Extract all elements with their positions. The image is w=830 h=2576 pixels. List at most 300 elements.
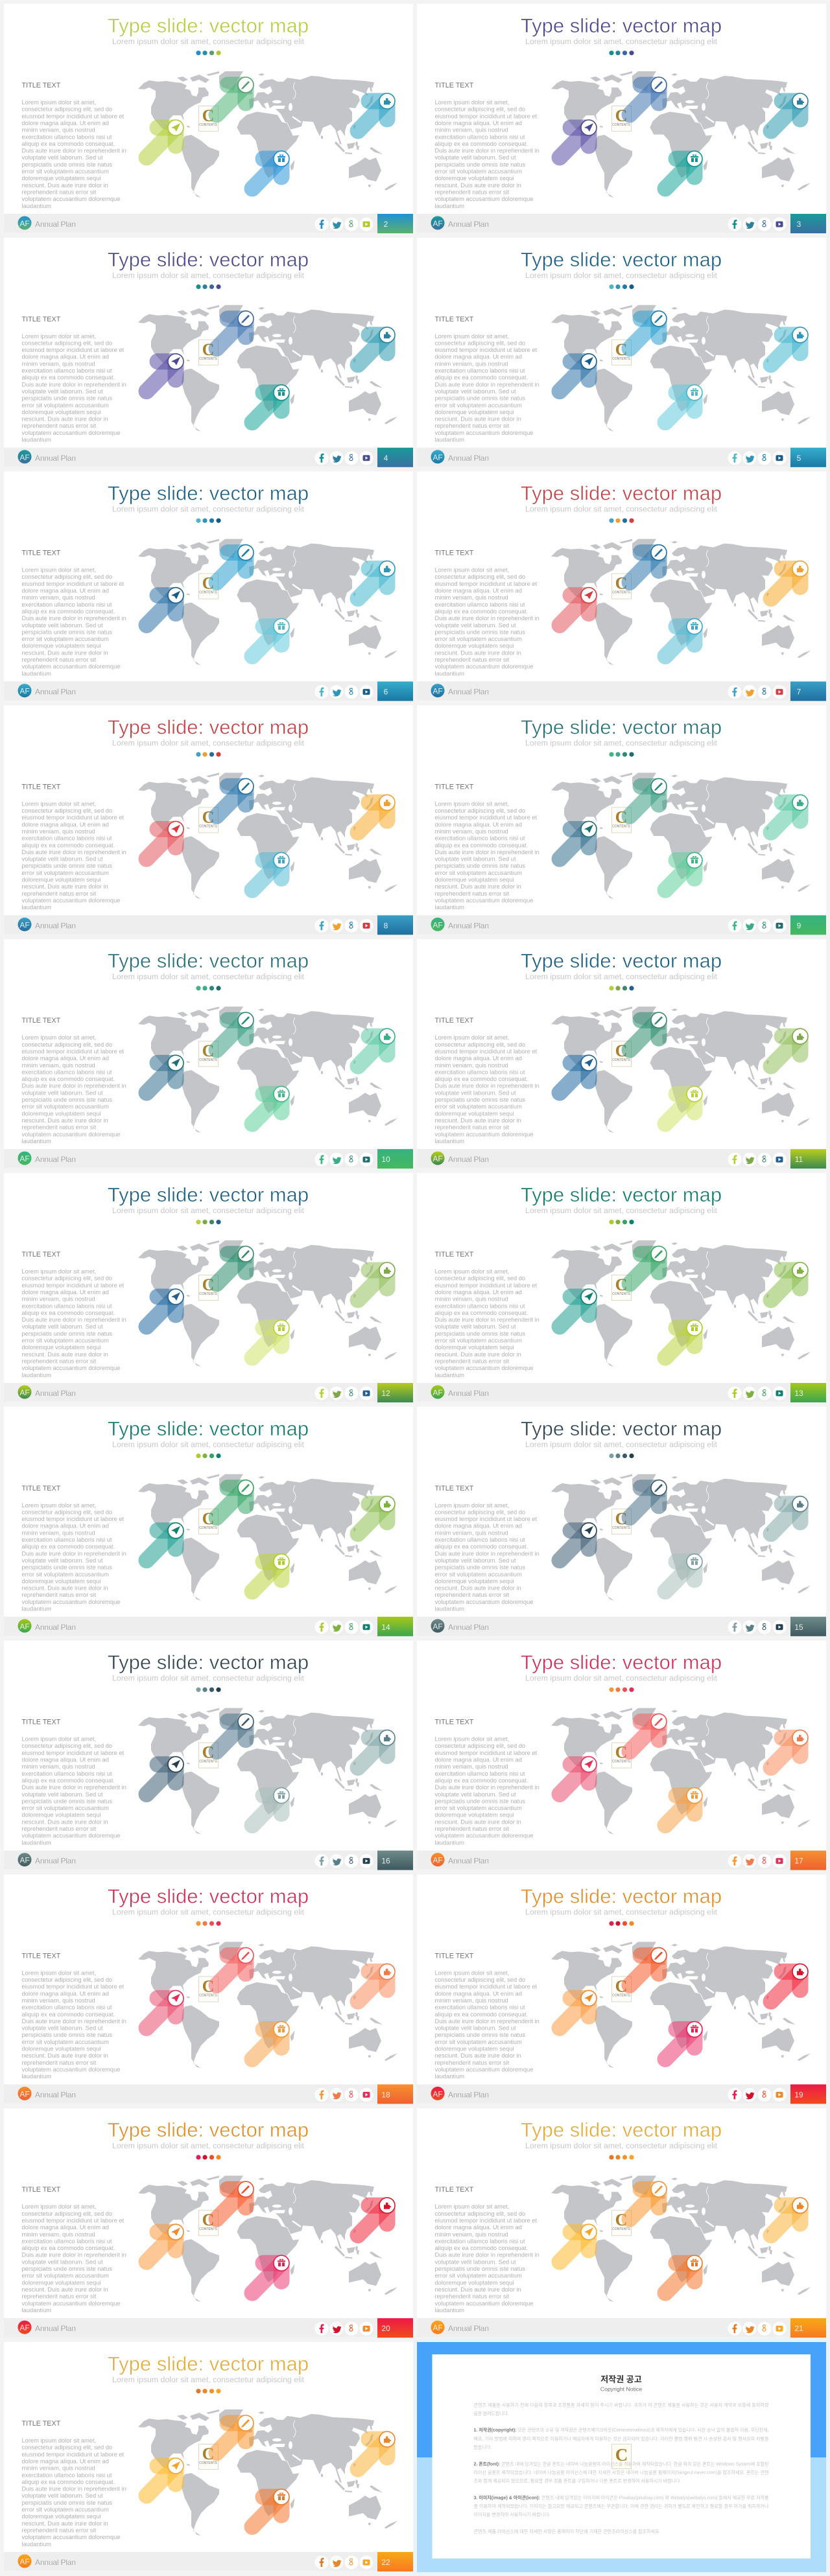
logo stamp	[198, 2444, 218, 2469]
body text: perspiciatis unde omnis iste natus	[434, 1564, 525, 1571]
body text: laudantium	[22, 2541, 51, 2547]
body text: consectetur adipiscing elit, sed do	[22, 340, 112, 346]
body text: eiusmod tempor incididunt ut labore et	[22, 1984, 124, 1990]
body text: laudantium	[22, 904, 51, 911]
body text: minim veniam, quis nostrud	[22, 2231, 95, 2238]
body text: perspiciatis unde omnis iste natus	[434, 863, 525, 869]
map pins	[147, 1246, 395, 1358]
body text: voluptatem accusantium doloremque	[434, 196, 533, 202]
text heading: TITLE TEXT	[22, 1251, 61, 1259]
body text: error sit voluptatem accusantium	[434, 870, 522, 876]
text heading: TITLE TEXT	[22, 316, 61, 323]
slide 16	[4, 1641, 413, 1870]
footer: 11	[795, 1155, 803, 1164]
body text: nesciunt. Duis aute irure dolor in	[434, 1818, 521, 1825]
body text: error sit voluptatem accusantium	[22, 1805, 109, 1811]
copyright subheading: Copyright Notice	[600, 2386, 642, 2393]
footer: 7	[797, 688, 801, 697]
body text: exercitation ullamco laboris nisi ut	[22, 1770, 112, 1777]
body text: Lorem ipsum dolor sit amet,	[434, 1034, 509, 1041]
body text: Duis aute irure dolor in reprehenderit in	[22, 148, 126, 154]
dots	[196, 986, 221, 990]
body text: voluptatem accusantium doloremque	[22, 664, 120, 670]
slide 20	[4, 2108, 413, 2338]
body text: reprehenderit natus error sit	[22, 890, 97, 897]
subtitle: Lorem ipsum dolor sit amet, consectetur adipiscing elit	[112, 738, 305, 747]
dots	[196, 1454, 221, 1458]
body text: exercitation ullamco laboris nisi ut	[22, 133, 112, 140]
body text: minim veniam, quis nostrud	[22, 360, 95, 367]
body text: consectetur adipiscing elit, sed do	[434, 1977, 525, 1983]
body text: voluptate velit laborum. Sed ut	[22, 856, 103, 863]
body text: reprehenderit natus error sit	[434, 1592, 510, 1598]
footer	[4, 1383, 413, 1402]
footer: Annual Plan	[35, 2090, 76, 2099]
body text: exercitation ullamco laboris nisi ut	[22, 601, 112, 608]
body text: perspiciatis unde omnis iste natus	[434, 1330, 525, 1337]
body text: error sit voluptatem accusantium	[22, 1571, 109, 1577]
slide 14	[4, 1407, 413, 1636]
subtitle: Lorem ipsum dolor sit amet, consectetur adipiscing elit	[525, 37, 718, 46]
map pins	[560, 545, 808, 656]
body text: Duis aute irure dolor in reprehenderit in	[434, 1083, 540, 1089]
body text: doloremque voluptatem sequi	[22, 409, 101, 415]
body text: Lorem ipsum dolor sit amet,	[22, 2203, 96, 2210]
body text: minim veniam, quis nostrud	[22, 2465, 95, 2472]
footer: AF	[19, 1154, 30, 1163]
body text: eiusmod tempor incididunt ut labore et	[434, 815, 538, 821]
body text: dolore magna aliqua. Ut enim ad	[22, 588, 109, 594]
body text: laudantium	[22, 2073, 51, 2080]
world map	[138, 2409, 397, 2536]
footer: Annual Plan	[448, 1623, 489, 1632]
footer: Annual Plan	[35, 2324, 76, 2333]
logo stamp	[198, 106, 218, 131]
dots	[196, 518, 221, 523]
footer: Annual Plan	[448, 688, 489, 697]
body text: consectetur adipiscing elit, sed do	[434, 340, 525, 346]
text heading: TITLE TEXT	[22, 1485, 61, 1492]
footer: 20	[381, 2324, 390, 2333]
intro paragraph: 음을 알려드립니다.	[473, 2410, 509, 2416]
body text: eiusmod tempor incididunt ut labore et	[22, 113, 124, 119]
body text: laudantium	[434, 1138, 464, 1144]
title: Type slide: vector map	[108, 949, 309, 972]
dots	[609, 1921, 634, 1926]
dots	[196, 51, 221, 55]
body text: dolore magna aliqua. Ut enim ad	[434, 1757, 522, 1763]
body text: Duis aute irure dolor in reprehenderit in	[22, 615, 126, 621]
body text: exercitation ullamco laboris nisi ut	[22, 1303, 112, 1309]
body text: eiusmod tempor incididunt ut labore et	[434, 2217, 538, 2223]
dots	[196, 2389, 221, 2393]
body text: minim veniam, quis nostrud	[22, 1062, 95, 1069]
body text: dolore magna aliqua. Ut enim ad	[22, 1523, 109, 1529]
body text: laudantium	[22, 670, 51, 677]
title: Type slide: vector map	[108, 2118, 309, 2141]
body text: voluptatem accusantium doloremque	[22, 430, 120, 436]
body text: minim veniam, quis nostrud	[434, 594, 508, 601]
map pins	[560, 1947, 808, 2059]
body text: consectetur adipiscing elit, sed do	[434, 1743, 525, 1749]
body text: dolore magna aliqua. Ut enim ad	[22, 2458, 109, 2465]
title: Type slide: vector map	[108, 482, 309, 505]
paragraph 2: 츠와 함께 제공되지 않으므로, 필요할 경우 정품 폰트를 구입하거나 다른 폰트로 변경하여 사용하시기 바랍니다.	[473, 2478, 682, 2484]
body text: doloremque voluptatem sequi	[434, 2279, 514, 2286]
footer: 17	[794, 1857, 803, 1866]
world map	[138, 71, 397, 198]
body text: voluptatem accusantium doloremque	[22, 2534, 120, 2540]
subtitle: Lorem ipsum dolor sit amet, consectetur adipiscing elit	[112, 1206, 305, 1215]
logo stamp	[198, 2210, 218, 2236]
footer: AF	[433, 219, 443, 228]
body text: aliquip ex ea commodo consequat.	[22, 1778, 115, 1784]
body text: minim veniam, quis nostrud	[434, 828, 508, 835]
body text: doloremque voluptatem sequi	[434, 643, 514, 649]
body text: nesciunt. Duis aute irure dolor in	[22, 649, 108, 656]
body text: eiusmod tempor incididunt ut labore et	[22, 815, 124, 821]
body text: consectetur adipiscing elit, sed do	[22, 574, 112, 580]
dots	[196, 752, 221, 757]
body text: aliquip ex ea commodo consequat.	[22, 1310, 115, 1316]
body text: error sit voluptatem accusantium	[22, 2039, 109, 2045]
body text: consectetur adipiscing elit, sed do	[434, 807, 525, 814]
body text: aliquip ex ea commodo consequat.	[22, 608, 115, 614]
slide 4	[4, 238, 413, 467]
subtitle: Lorem ipsum dolor sit amet, consectetur adipiscing elit	[525, 972, 718, 981]
body text: voluptate velit laborum. Sed ut	[434, 388, 516, 395]
body text: exercitation ullamco laboris nisi ut	[22, 2472, 112, 2478]
map pins	[560, 1714, 808, 1826]
title: Type slide: vector map	[108, 1651, 309, 1674]
text heading: TITLE TEXT	[434, 1485, 474, 1492]
body text: doloremque voluptatem sequi	[434, 1110, 514, 1117]
body text: Duis aute irure dolor in reprehenderit in	[434, 1317, 540, 1323]
body text: voluptatem accusantium doloremque	[22, 1833, 120, 1839]
body text: voluptatem accusantium doloremque	[434, 1599, 533, 1605]
footer	[4, 915, 413, 934]
body text: consectetur adipiscing elit, sed do	[22, 1743, 112, 1749]
body text: eiusmod tempor incididunt ut labore et	[22, 1282, 124, 1288]
body text: reprehenderit natus error sit	[434, 1358, 510, 1364]
logo stamp	[612, 1041, 632, 1067]
subtitle: Lorem ipsum dolor sit amet, consectetur adipiscing elit	[525, 1440, 718, 1449]
map pins	[147, 1714, 395, 1826]
body text: reprehenderit natus error sit	[22, 656, 97, 663]
body text: nesciunt. Duis aute irure dolor in	[22, 2286, 108, 2293]
body text: error sit voluptatem accusantium	[434, 168, 522, 175]
body text: voluptatem accusantium doloremque	[434, 664, 533, 670]
body text: aliquip ex ea commodo consequat.	[434, 1778, 528, 1784]
closing paragraph: 콘텐츠 제품 라이선스에 대한 자세한 사항은 홈페이지 하단에 기재한 콘텐츠라이선스를 참조하세요.	[473, 2529, 661, 2535]
body text: voluptate velit laborum. Sed ut	[22, 1791, 103, 1798]
body text: reprehenderit natus error sit	[434, 890, 510, 897]
body text: voluptatem accusantium doloremque	[434, 2300, 533, 2306]
footer: AF	[433, 1856, 443, 1865]
body text: minim veniam, quis nostrud	[434, 1062, 508, 1069]
world map	[138, 1006, 397, 1133]
slide 19	[417, 1874, 826, 2104]
body text: perspiciatis unde omnis iste natus	[434, 1798, 525, 1804]
footer: 12	[381, 1389, 390, 1398]
text heading: TITLE TEXT	[22, 1017, 61, 1025]
map pins	[147, 545, 395, 656]
body text: eiusmod tempor incididunt ut labore et	[434, 113, 538, 119]
body text: consectetur adipiscing elit, sed do	[22, 106, 112, 113]
footer: 16	[381, 1857, 390, 1866]
footer: Annual Plan	[35, 1857, 76, 1866]
body text: consectetur adipiscing elit, sed do	[22, 2444, 112, 2451]
paragraph 3: 을 이용하여 제작되었습니다. 이미지는 참고요망 제공되고 콘텐츠에는 무관합니다. 이에 관한 권리는 귀하가 별도로 확인하고 필요할 경우 허가를 취득하거나	[473, 2503, 769, 2509]
body text: Lorem ipsum dolor sit amet,	[434, 333, 509, 340]
body text: minim veniam, quis nostrud	[22, 1529, 95, 1536]
body text: voluptate velit laborum. Sed ut	[434, 2258, 516, 2265]
map pins	[147, 2181, 395, 2293]
body text: Duis aute irure dolor in reprehenderit in	[434, 381, 540, 388]
body text: voluptate velit laborum. Sed ut	[434, 622, 516, 629]
subtitle: Lorem ipsum dolor sit amet, consectetur adipiscing elit	[112, 505, 305, 514]
footer	[4, 1617, 413, 1636]
title: Type slide: vector map	[521, 949, 722, 972]
footer: 8	[384, 921, 388, 930]
body text: perspiciatis unde omnis iste natus	[22, 629, 112, 635]
body text: doloremque voluptatem sequi	[22, 1578, 101, 1584]
footer: AF	[433, 1154, 443, 1163]
footer: Annual Plan	[448, 1389, 489, 1398]
body text: dolore magna aliqua. Ut enim ad	[434, 1523, 522, 1529]
body text: voluptatem accusantium doloremque	[434, 2066, 533, 2072]
subtitle: Lorem ipsum dolor sit amet, consectetur adipiscing elit	[112, 1440, 305, 1449]
body text: Duis aute irure dolor in reprehenderit in	[22, 2486, 126, 2492]
world map	[551, 1240, 811, 1367]
body text: laudantium	[22, 1839, 51, 1846]
body text: Lorem ipsum dolor sit amet,	[434, 1736, 509, 1743]
body text: exercitation ullamco laboris nisi ut	[434, 835, 525, 842]
body text: doloremque voluptatem sequi	[434, 1578, 514, 1584]
body text: aliquip ex ea commodo consequat.	[434, 1076, 528, 1082]
footer	[417, 1383, 826, 1402]
footer: AF	[433, 920, 443, 929]
body text: error sit voluptatem accusantium	[22, 2507, 109, 2513]
dots	[196, 2155, 221, 2159]
subtitle: Lorem ipsum dolor sit amet, consectetur adipiscing elit	[525, 2141, 718, 2150]
map pins	[560, 311, 808, 423]
footer: Annual Plan	[35, 454, 76, 463]
body text: doloremque voluptatem sequi	[22, 2279, 101, 2286]
subtitle: Lorem ipsum dolor sit amet, consectetur adipiscing elit	[112, 2375, 305, 2384]
body text: exercitation ullamco laboris nisi ut	[22, 367, 112, 374]
body text: eiusmod tempor incididunt ut labore et	[434, 1516, 538, 1522]
footer	[4, 214, 413, 233]
body text: Duis aute irure dolor in reprehenderit in	[434, 849, 540, 855]
body text: reprehenderit natus error sit	[434, 2060, 510, 2066]
subtitle: Lorem ipsum dolor sit amet, consectetur adipiscing elit	[525, 738, 718, 747]
footer: AF	[433, 2323, 443, 2332]
body text: consectetur adipiscing elit, sed do	[22, 1977, 112, 1983]
body text: perspiciatis unde omnis iste natus	[22, 1097, 112, 1103]
body text: doloremque voluptatem sequi	[434, 2046, 514, 2052]
body text: perspiciatis unde omnis iste natus	[434, 2266, 525, 2272]
body text: nesciunt. Duis aute irure dolor in	[22, 2052, 108, 2059]
body text: laudantium	[434, 1606, 464, 1612]
body text: perspiciatis unde omnis iste natus	[22, 863, 112, 869]
body text: dolore magna aliqua. Ut enim ad	[22, 354, 109, 360]
body text: error sit voluptatem accusantium	[434, 402, 522, 408]
body text: Lorem ipsum dolor sit amet,	[434, 800, 509, 807]
body text: aliquip ex ea commodo consequat.	[22, 1076, 115, 1082]
slide 8	[4, 705, 413, 934]
paragraph 1: 배포, 기타 방법에 의하여 영리 목적으로 이용하거나 제삼자에게 이용하는 것은 금지되어 있습니다. 이러한 불법 행위 발견 시 손상된 감사 및 형사상의 처벌을	[473, 2435, 769, 2441]
paragraph 1: 1. 저작권(copyright): 모든 콘텐츠의 소유 및 저작권은 콘텐츠메이크아웃(Contentsmakeout)과 제작자에게 있습니다. 사전 승낙 없이 불법적 이용, 무단전재,	[473, 2428, 769, 2433]
world map	[551, 539, 811, 666]
subtitle: Lorem ipsum dolor sit amet, consectetur adipiscing elit	[112, 37, 305, 46]
footer	[4, 682, 413, 701]
subtitle: Lorem ipsum dolor sit amet, consectetur adipiscing elit	[525, 1674, 718, 1683]
footer: Annual Plan	[35, 688, 76, 697]
body text: voluptatem accusantium doloremque	[22, 1131, 120, 1137]
body text: eiusmod tempor incididunt ut labore et	[434, 581, 538, 587]
body text: dolore magna aliqua. Ut enim ad	[434, 821, 522, 828]
body text: minim veniam, quis nostrud	[434, 2231, 508, 2238]
body text: doloremque voluptatem sequi	[434, 1344, 514, 1351]
logo stamp	[198, 1509, 218, 1534]
body text: nesciunt. Duis aute irure dolor in	[434, 182, 521, 189]
copyright heading: 저작권 공고	[600, 2374, 642, 2384]
body text: voluptatem accusantium doloremque	[434, 1131, 533, 1137]
body text: reprehenderit natus error sit	[22, 2293, 97, 2300]
subtitle: Lorem ipsum dolor sit amet, consectetur adipiscing elit	[112, 1674, 305, 1683]
body text: voluptate velit laborum. Sed ut	[434, 856, 516, 863]
text heading: TITLE TEXT	[22, 2186, 61, 2194]
body text: doloremque voluptatem sequi	[22, 643, 101, 649]
map pins	[147, 77, 395, 189]
body text: aliquip ex ea commodo consequat.	[22, 2479, 115, 2485]
dots	[609, 284, 634, 289]
subtitle: Lorem ipsum dolor sit amet, consectetur adipiscing elit	[525, 271, 718, 280]
body text: perspiciatis unde omnis iste natus	[22, 161, 112, 168]
body text: error sit voluptatem accusantium	[22, 402, 109, 408]
paragraph 3: 3. 이미지(image) & 아이콘(icon): 콘텐츠 내에 담겨있는 이미지와 아이콘은 Pixabay(pixabay.com) 와 Webalys(webalys.com) 등에서 제공한 무료 저작물	[473, 2496, 769, 2500]
text heading: TITLE TEXT	[434, 82, 474, 89]
body text: aliquip ex ea commodo consequat.	[434, 608, 528, 614]
body text: perspiciatis unde omnis iste natus	[22, 2032, 112, 2038]
body text: perspiciatis unde omnis iste natus	[434, 395, 525, 402]
body text: error sit voluptatem accusantium	[22, 168, 109, 175]
body text: voluptate velit laborum. Sed ut	[22, 622, 103, 629]
body text: error sit voluptatem accusantium	[22, 1104, 109, 1110]
body text: nesciunt. Duis aute irure dolor in	[434, 1351, 521, 1358]
body text: consectetur adipiscing elit, sed do	[434, 106, 525, 113]
body text: nesciunt. Duis aute irure dolor in	[22, 883, 108, 890]
body text: minim veniam, quis nostrud	[22, 1296, 95, 1303]
world map	[138, 305, 397, 432]
logo stamp	[612, 106, 632, 131]
body text: exercitation ullamco laboris nisi ut	[434, 601, 525, 608]
body text: voluptate velit laborum. Sed ut	[22, 1089, 103, 1096]
text heading: TITLE TEXT	[22, 783, 61, 791]
logo stamp	[198, 1743, 218, 1768]
slide 22	[4, 2342, 413, 2571]
body text: exercitation ullamco laboris nisi ut	[434, 133, 525, 140]
body text: dolore magna aliqua. Ut enim ad	[434, 120, 522, 126]
text heading: TITLE TEXT	[434, 1719, 474, 1726]
logo stamp	[612, 340, 632, 365]
body text: doloremque voluptatem sequi	[22, 175, 101, 181]
footer: AF	[19, 920, 30, 929]
body text: laudantium	[434, 2307, 464, 2314]
footer: AF	[19, 1388, 30, 1397]
world map	[551, 1474, 811, 1601]
world map	[138, 1474, 397, 1601]
subtitle: Lorem ipsum dolor sit amet, consectetur adipiscing elit	[112, 2141, 305, 2150]
dots	[196, 1921, 221, 1926]
body text: error sit voluptatem accusantium	[434, 636, 522, 642]
body text: Duis aute irure dolor in reprehenderit in	[434, 1784, 540, 1791]
body text: voluptate velit laborum. Sed ut	[434, 154, 516, 161]
footer: 15	[794, 1623, 803, 1632]
slide 7	[417, 472, 826, 701]
logo stamp: C	[615, 2445, 628, 2465]
body text: dolore magna aliqua. Ut enim ad	[22, 1055, 109, 1062]
map pins	[147, 778, 395, 890]
text heading: TITLE TEXT	[434, 1017, 474, 1025]
body text: consectetur adipiscing elit, sed do	[22, 1509, 112, 1515]
body text: doloremque voluptatem sequi	[22, 1344, 101, 1351]
body text: laudantium	[22, 437, 51, 443]
body text: consectetur adipiscing elit, sed do	[434, 2210, 525, 2217]
body text: consectetur adipiscing elit, sed do	[434, 1509, 525, 1515]
body text: voluptate velit laborum. Sed ut	[434, 1557, 516, 1564]
logo stamp	[612, 1977, 632, 2002]
map pins	[560, 778, 808, 890]
body text: consectetur adipiscing elit, sed do	[22, 1275, 112, 1282]
footer: AF	[19, 2557, 30, 2566]
text heading: TITLE TEXT	[22, 1952, 61, 1960]
text heading: TITLE TEXT	[434, 783, 474, 791]
body text: consectetur adipiscing elit, sed do	[22, 2210, 112, 2217]
text heading: TITLE TEXT	[434, 316, 474, 323]
slide 15	[417, 1407, 826, 1636]
footer: 9	[797, 921, 801, 930]
logo stamp	[198, 807, 218, 833]
body text: reprehenderit natus error sit	[22, 1358, 97, 1364]
body text: dolore magna aliqua. Ut enim ad	[22, 1289, 109, 1295]
logo stamp	[198, 340, 218, 365]
slide 10	[4, 939, 413, 1168]
title: Type slide: vector map	[108, 14, 309, 37]
footer	[417, 2084, 826, 2104]
footer: AF	[433, 1622, 443, 1631]
body text: nesciunt. Duis aute irure dolor in	[434, 2052, 521, 2059]
body text: minim veniam, quis nostrud	[22, 1997, 95, 2004]
subtitle: Lorem ipsum dolor sit amet, consectetur adipiscing elit	[112, 1907, 305, 1916]
footer	[417, 1149, 826, 1168]
subtitle: Lorem ipsum dolor sit amet, consectetur adipiscing elit	[525, 1206, 718, 1215]
body text: voluptate velit laborum. Sed ut	[22, 2492, 103, 2499]
body text: Lorem ipsum dolor sit amet,	[434, 1268, 509, 1275]
body text: dolore magna aliqua. Ut enim ad	[22, 1990, 109, 1997]
world map	[138, 772, 397, 899]
body text: voluptatem accusantium doloremque	[22, 196, 120, 202]
body text: dolore magna aliqua. Ut enim ad	[434, 1289, 522, 1295]
body text: dolore magna aliqua. Ut enim ad	[434, 1990, 522, 1997]
body text: Duis aute irure dolor in reprehenderit in	[22, 1550, 126, 1557]
body text: nesciunt. Duis aute irure dolor in	[22, 1585, 108, 1592]
body text: laudantium	[22, 203, 51, 209]
body text: nesciunt. Duis aute irure dolor in	[434, 1585, 521, 1592]
logo stamp	[612, 2444, 632, 2469]
footer: Annual Plan	[35, 2558, 76, 2567]
